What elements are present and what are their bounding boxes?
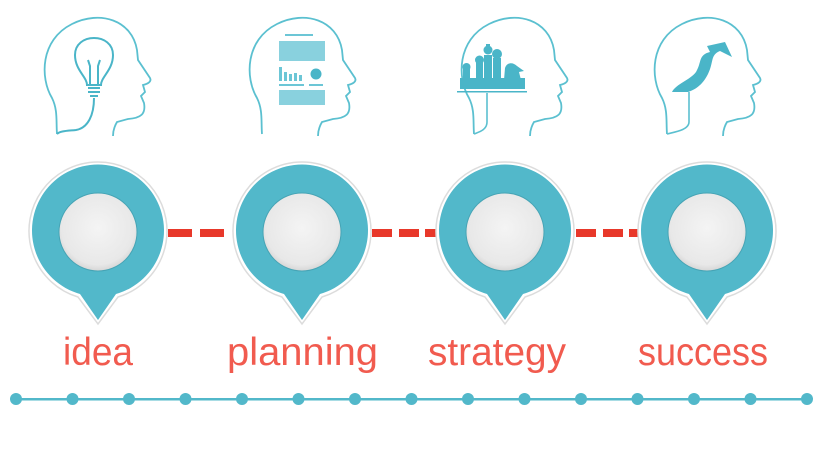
pin 3 xyxy=(436,162,574,324)
pin 2 xyxy=(233,162,371,324)
label: idea: idea xyxy=(63,331,133,374)
label: success: success xyxy=(638,331,768,374)
dotted timeline xyxy=(10,393,813,405)
pin 1 xyxy=(29,162,167,324)
head 1: idea xyxy=(45,18,150,136)
icon: light bulb xyxy=(57,38,113,134)
icon: rising arrow xyxy=(672,42,732,92)
pin 4 xyxy=(638,162,776,324)
icon: document with chart xyxy=(279,34,325,105)
head 4: success xyxy=(655,18,760,136)
icon: chess pieces xyxy=(457,44,527,92)
label: planning: planning xyxy=(227,331,378,374)
head 2: planning xyxy=(250,18,355,136)
dashed connector lines xyxy=(168,229,641,237)
label: strategy: strategy xyxy=(428,331,566,374)
head 3: strategy xyxy=(457,18,567,136)
